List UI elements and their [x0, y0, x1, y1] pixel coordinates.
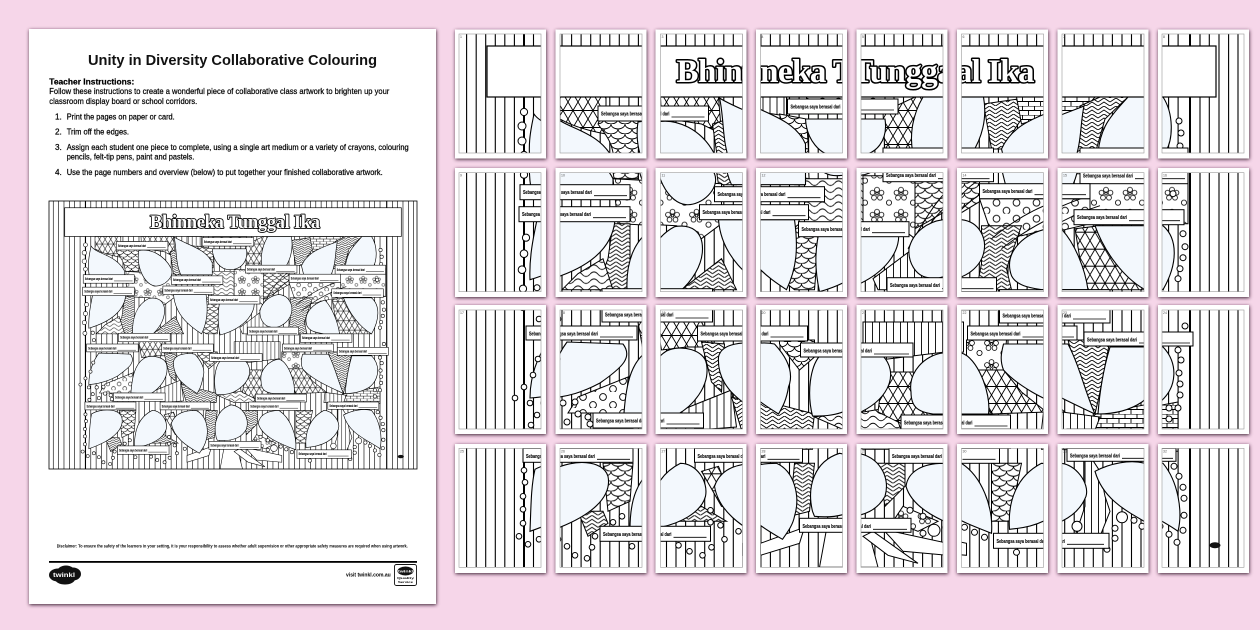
card: page 28 [514, 91, 1170, 573]
card: page 17: 17 [460, 311, 464, 315]
card: page 26: 26 [561, 449, 565, 453]
card: page 23: 23 [1063, 311, 1067, 315]
card: page 15: 15 [1063, 174, 1067, 178]
card: page 5: 5 [862, 35, 864, 39]
card: page 21: 21 [862, 311, 866, 315]
text block: teacher instructions: Teacher Instructions: [49, 77, 134, 86]
text block: teacher instructions: 2. [55, 128, 62, 137]
card: page 27: 27 [662, 449, 665, 453]
card: page 23 [570, 72, 1226, 548]
text block: teacher instructions: Follow these instructions to create a wonderful piece of collaborative class artwork to brighten up your [49, 87, 390, 96]
card: page 4: 4 [762, 35, 764, 39]
icon: badge: twinkl [398, 568, 413, 574]
text block: teacher instructions: Assign each student one piece to complete, using a single art medium or a variety of crayons, colouring [67, 143, 409, 152]
text block: teacher instructions [49, 77, 409, 177]
card: page 28: 28 [762, 449, 765, 453]
card: page 4 [514, 30, 1170, 510]
icon: badge: Quality [397, 576, 415, 580]
card: page 22 [552, 72, 1208, 548]
text block: teacher instructions: Print the pages on paper or card. [67, 112, 175, 121]
card: page 31 [570, 91, 1226, 573]
icon: twinkl logo [49, 566, 81, 584]
card: page 2: 2 [561, 35, 563, 39]
card: page 29: 29 [862, 449, 866, 453]
card: page 25 [455, 91, 1115, 573]
text block: teacher instructions: classroom display board or school corridors. [49, 97, 197, 106]
card: page 17 [455, 72, 1115, 548]
text block: teacher instructions: Trim off the edges. [67, 128, 129, 137]
card: page 21 [533, 72, 1189, 548]
card: page 6: 6 [962, 35, 964, 39]
card: page 16 [588, 54, 1249, 530]
card: page 24: 24 [1163, 311, 1167, 315]
card: page 30 [552, 91, 1208, 573]
icon: twinkl logo: twinkl [53, 572, 75, 579]
icon: badge [394, 564, 416, 586]
card: page 8 [588, 30, 1249, 510]
card: page 11 [496, 54, 1152, 530]
text block: teacher instructions: 1. [55, 112, 62, 121]
card: page 10: 10 [561, 174, 565, 178]
card: page 13 [533, 54, 1189, 530]
card: page 11: 11 [662, 174, 665, 178]
text: website: visit twinkl.com.au [346, 573, 391, 579]
text block: disclaimer: Disclaimer: To ensure the safety of the learners in your setting, it is your responsibility to assess whether adult supervision or other appropriate safety measures are required when using artwork. [57, 543, 408, 548]
card: page 12 [514, 54, 1170, 530]
card: page 15 [570, 54, 1226, 530]
heading: sheet title: Unity in Diversity Collaborative Colouring [88, 53, 377, 69]
card: page 14 [552, 54, 1208, 530]
card: page 2 [478, 30, 1134, 510]
icon: badge: Service [398, 580, 413, 584]
card: page 6 [552, 30, 1208, 510]
card: page 1: 1 [460, 35, 462, 39]
text block: teacher instructions: pencils, felt-tip pens, paint and pastels. [67, 153, 194, 162]
card: page 5 [533, 30, 1189, 510]
card: page 26 [478, 91, 1134, 573]
text block: teacher instructions: Use the page numbers and overview (below) to put together your finished collaborative artwork. [67, 168, 383, 177]
card: page 12: 12 [762, 174, 765, 178]
card: page 24 [588, 72, 1249, 548]
card: page 20 [514, 72, 1170, 548]
card: page 32: 32 [1163, 449, 1167, 453]
card: page 32 [588, 91, 1249, 573]
card: page 27 [496, 91, 1152, 573]
card: page 19: 19 [662, 311, 665, 315]
card: page 20: 20 [762, 311, 765, 315]
card: page 18: 18 [561, 311, 565, 315]
overview of collaborative artwork [49, 201, 417, 469]
card: page 25: 25 [460, 449, 464, 453]
card: page 29 [533, 91, 1189, 573]
card: page 1 [455, 30, 1115, 510]
card: page 22: 22 [962, 311, 966, 315]
card: page 7: 7 [1063, 35, 1065, 39]
text block: teacher instructions: 3. [55, 143, 62, 152]
text block: teacher instructions: 4. [55, 168, 62, 177]
card: page 3 [496, 30, 1152, 510]
card: page 8: 8 [1163, 35, 1165, 39]
card: page 3: 3 [662, 35, 664, 39]
panel: teacher instructions sheet [29, 29, 436, 604]
card: page 10 [478, 54, 1134, 530]
card: page 16: 16 [1163, 174, 1167, 178]
card: page 14: 14 [962, 174, 966, 178]
card: page 19 [496, 72, 1152, 548]
card: page 9 [455, 54, 1115, 530]
card: page 30: 30 [962, 449, 966, 453]
card: page 9: 9 [460, 174, 462, 178]
card: page 18 [478, 72, 1134, 548]
card: page 7 [570, 30, 1226, 510]
card: page 31: 31 [1063, 449, 1067, 453]
card: page 13: 13 [862, 174, 866, 178]
